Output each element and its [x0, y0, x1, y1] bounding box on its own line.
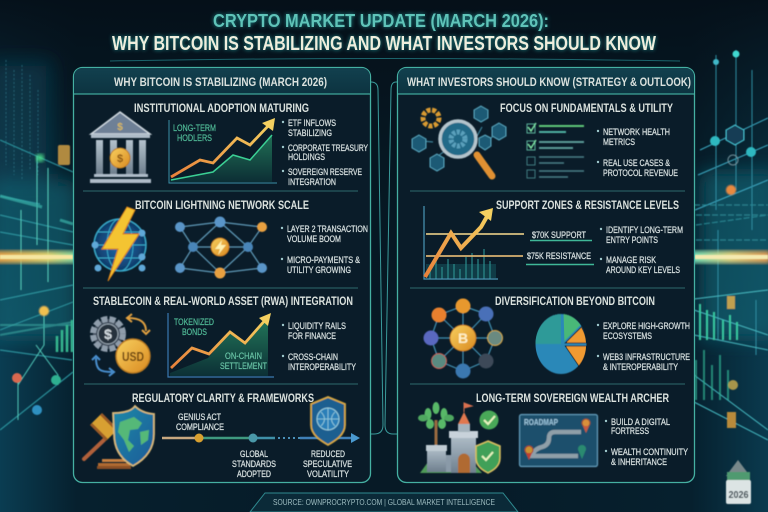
panel header	[398, 68, 694, 94]
footer source bar	[250, 493, 518, 512]
bullets: support: IDENTIFY LONG-TERM	[606, 225, 683, 236]
support and resistance labels	[526, 230, 594, 264]
bullets: fundamentals: METRICS	[603, 137, 635, 148]
bullets: sovereign wealth: BUILD A DIGITAL	[611, 417, 670, 428]
icon: bank	[90, 112, 151, 183]
icon: magnifier, gear and cubes	[412, 106, 506, 176]
chart labels: BONDS	[182, 327, 207, 338]
bullets: diversification: ECOSYSTEMS	[603, 331, 652, 342]
timeline labels: STANDARDS	[232, 459, 276, 470]
left circuit decoration	[0, 60, 84, 430]
bullets: stablecoin: LIQUIDITY RAILS	[288, 321, 346, 332]
section heading: fundamentals: FOCUS ON FUNDAMENTALS & UTILITY	[500, 101, 673, 115]
panel: why bitcoin is stabilizing	[74, 68, 370, 482]
roadmap card: ROADMAP	[524, 417, 558, 427]
icon: gavel and shield	[84, 406, 154, 469]
bullets: sovereign wealth: WEALTH CONTINUITY	[611, 447, 689, 458]
bullets: institutional: ETF INFLOWS	[288, 118, 336, 129]
title	[112, 10, 657, 55]
section heading: stablecoin: STABLECOIN & REAL-WORLD ASSET (RWA) INTEGRATION	[93, 294, 353, 308]
bullets: sovereign wealth: & INHERITANCE	[611, 457, 667, 468]
bullets: lightning: MICRO-PAYMENTS &	[287, 255, 361, 266]
timeline labels: SPECULATIVE	[303, 459, 352, 470]
bullets: support	[600, 225, 683, 276]
bullets: sovereign wealth	[605, 417, 689, 468]
panel header: WHY BITCOIN IS STABILIZING (MARCH 2026)	[114, 75, 327, 89]
icon: gear and USD coin	[92, 314, 150, 376]
bullets: stablecoin: INTEROPERABILITY	[288, 362, 356, 373]
bullets: fundamentals: PROTOCOL REVENUE	[603, 168, 678, 179]
bullets: stablecoin: CROSS-CHAIN	[288, 352, 338, 363]
badge: 2026	[726, 460, 751, 504]
icon: bank: $	[117, 122, 123, 133]
bullets: lightning	[281, 224, 368, 276]
bullets: diversification	[597, 321, 690, 373]
chart labels	[174, 317, 267, 372]
chart: support and resistance	[424, 206, 524, 279]
diagram: crypto network: B	[458, 330, 468, 346]
icon: gear and USD coin: $	[104, 326, 112, 342]
timeline	[162, 433, 360, 443]
chart: long-term hodlers	[169, 118, 277, 183]
section heading: diversification: DIVERSIFICATION BEYOND BITCOIN	[495, 294, 655, 308]
bullets: fundamentals	[597, 127, 678, 179]
chart label: HODLERS	[177, 133, 212, 144]
bullets: stablecoin: FOR FINANCE	[288, 331, 336, 342]
bullets: sovereign wealth: FORTRESS	[611, 426, 649, 437]
bullets: stablecoin	[282, 321, 356, 373]
bullets: institutional: INTEGRATION	[288, 177, 336, 188]
panel: what investors should know	[398, 68, 694, 482]
bullets: lightning: LAYER 2 TRANSACTION	[287, 224, 368, 235]
support and resistance labels: $75K RESISTANCE	[527, 251, 591, 262]
bullets: lightning: VOLUME BOOM	[287, 234, 341, 245]
icon: bank: $	[117, 153, 123, 165]
footer source bar: SOURCE: OWNPROCRYPTO.COM | GLOBAL MARKET INTELLIGENCE	[273, 497, 495, 507]
bullets: institutional: HOLDINGS	[288, 152, 325, 163]
title: CRYPTO MARKET UPDATE (MARCH 2026):	[213, 10, 549, 31]
chart: pie	[536, 314, 586, 374]
bullets: diversification: & INTEROPERABILITY	[603, 362, 678, 373]
support and resistance labels: $70K SUPPORT	[532, 230, 586, 241]
chart label	[173, 123, 216, 144]
bullets: institutional	[282, 118, 368, 188]
section heading: sovereign wealth: LONG-TERM SOVEREIGN WEALTH ARCHER	[476, 391, 669, 405]
timeline labels: COMPLIANCE	[176, 422, 224, 433]
timeline labels: GENIUS ACT	[178, 412, 221, 423]
section heading: support zones: SUPPORT ZONES & RESISTANCE LEVELS	[496, 198, 679, 212]
icon: gear and USD coin: USD	[122, 350, 144, 364]
chart labels: ON-CHAIN	[225, 351, 262, 362]
bullets: lightning: UTILITY GROWING	[287, 265, 351, 276]
timeline labels: GLOBAL	[240, 449, 268, 460]
chart labels: SETTLEMENT	[220, 361, 267, 372]
icon: globe and lightning bolt	[92, 207, 146, 281]
section heading: regulatory: REGULATORY CLARITY & FRAMEWORKS	[132, 391, 314, 405]
bullets: diversification: WEB3 INFRASTRUCTURE	[603, 352, 690, 363]
badge: 2026: 2026	[728, 489, 749, 501]
timeline labels: REDUCED	[311, 449, 345, 460]
timeline labels: VOLATILITY	[307, 469, 350, 480]
bullets: fundamentals: REAL USE CASES &	[603, 158, 670, 169]
timeline labels	[176, 412, 352, 480]
panel header	[74, 68, 370, 94]
roadmap card	[520, 414, 598, 466]
icon: globe shield	[311, 397, 345, 445]
chart label: LONG-TERM	[173, 123, 216, 134]
panel header: WHAT INVESTORS SHOULD KNOW (STRATEGY & OUTLOOK)	[407, 75, 691, 89]
diagram: crypto network	[424, 298, 502, 378]
bullets: support: AROUND KEY LEVELS	[606, 265, 680, 276]
section heading: lightning network: BITCOIN LIGHTNING NETWORK SCALE	[135, 198, 309, 212]
bullets: institutional: STABILIZING	[288, 128, 332, 139]
bullets: support: MANAGE RISK	[606, 255, 656, 266]
chart: tokenized bonds	[168, 313, 274, 377]
diagram: lightning network nodes	[175, 216, 267, 278]
bullets: support: ENTRY POINTS	[606, 235, 658, 246]
right circuit decoration	[690, 50, 768, 440]
chart labels: TOKENIZED	[174, 317, 214, 328]
bullets: fundamentals: NETWORK HEALTH	[603, 127, 670, 138]
bullets: diversification: EXPLORE HIGH-GROWTH	[603, 321, 690, 332]
section heading: institutional adoption: INSTITUTIONAL ADOPTION MATURING	[134, 101, 309, 115]
checklist	[527, 123, 584, 178]
bullets: institutional: SOVEREIGN RESERVE	[288, 167, 362, 178]
icon: tree, castle and shield	[418, 402, 500, 473]
bullets: institutional: CORPORATE TREASURY	[288, 143, 368, 154]
timeline labels: ADOPTED	[237, 469, 271, 480]
